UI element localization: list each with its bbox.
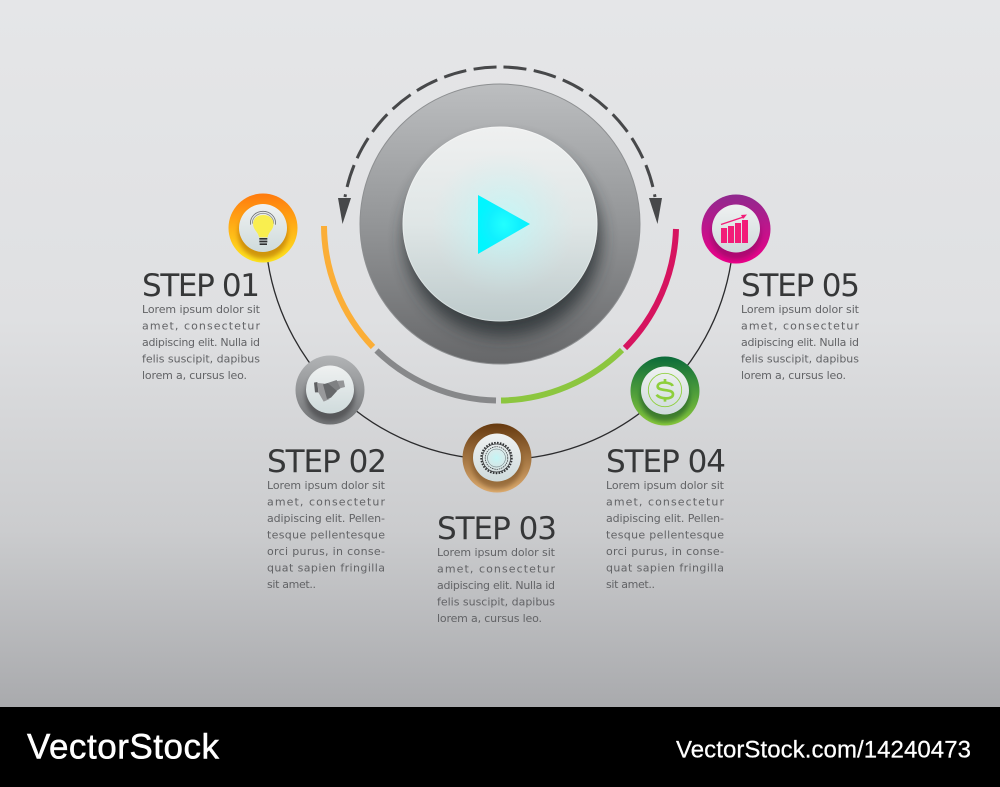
footer bar [0, 707, 1000, 787]
step 1 text [142, 268, 261, 382]
step 5 text [741, 268, 860, 382]
icon: play triangle [478, 195, 530, 254]
step 4 text: adipiscing elit. Pellen- [606, 512, 724, 525]
segmented progress ring [324, 226, 676, 400]
footer url: VectorStock.com/14240473 [676, 736, 971, 764]
step 4 text: STEP 04 [606, 444, 726, 480]
step 2 text: tesque pellentesque [267, 528, 385, 542]
icon: bar chart with arrow [721, 214, 748, 243]
step 2 text: quat sapien fringilla [267, 562, 385, 574]
footer logo text: VectorStock [27, 728, 220, 766]
step 4 badge [630, 356, 700, 426]
central dial [360, 84, 640, 364]
step 5 text: amet, consectetur [741, 320, 859, 332]
step 4 text: quat sapien fringilla [606, 562, 724, 574]
step 1 text: adipiscing elit. Nulla id [142, 336, 260, 349]
step 5 text: Lorem ipsum dolor sit [741, 303, 860, 316]
step 2 text: Lorem ipsum dolor sit [267, 479, 386, 492]
step 3 text: adipiscing elit. Nulla id [437, 579, 555, 592]
step 5 badge [702, 194, 770, 264]
step 2 badge [296, 356, 364, 424]
icon: light bulb [250, 211, 276, 245]
step 5 text: felis suscipit, dapibus [741, 352, 859, 366]
step 1 badge [228, 194, 298, 262]
step 2 text [267, 444, 387, 591]
step 3 text: amet, consectetur [437, 562, 555, 576]
step 1 text: Lorem ipsum dolor sit [142, 303, 261, 316]
step 3 text: STEP 03 [437, 511, 557, 547]
step 5 text: adipiscing elit. Nulla id [741, 336, 859, 349]
step 2 text: STEP 02 [267, 444, 387, 480]
icon: dollar coin [648, 373, 682, 407]
step 1 text: felis suscipit, dapibus [142, 352, 260, 366]
step 4 text: sit amet.. [606, 578, 655, 591]
step 2 text: orci purus, in conse- [267, 545, 385, 558]
dashed arrow: right [500, 67, 662, 224]
connector line [268, 262, 731, 460]
step 3 text [437, 511, 557, 625]
step 5 text: STEP 05 [741, 268, 860, 304]
step 4 text: amet, consectetur [606, 496, 724, 508]
dashed arrow: left [338, 67, 500, 224]
step 5 text: lorem a, cursus leo. [741, 369, 846, 382]
step 4 text: tesque pellentesque [606, 528, 724, 542]
step 1 text: lorem a, cursus leo. [142, 369, 247, 382]
step 3 text: felis suscipit, dapibus [437, 596, 555, 608]
step 4 text: orci purus, in conse- [606, 545, 724, 558]
step 4 text [606, 444, 726, 591]
icon: gear rings [481, 443, 512, 473]
step 3 text: lorem a, cursus leo. [437, 612, 542, 625]
step 3 text: Lorem ipsum dolor sit [437, 546, 556, 559]
step 1 text: STEP 01 [142, 268, 260, 304]
step 1 text: amet, consectetur [142, 320, 260, 332]
step 2 text: amet, consectetur [267, 496, 385, 508]
step 2 text: adipiscing elit. Pellen- [267, 512, 385, 525]
icon: handshake [314, 380, 345, 402]
step 3 badge [462, 424, 532, 492]
step 2 text: sit amet.. [267, 578, 316, 591]
step 4 text: Lorem ipsum dolor sit [606, 479, 725, 492]
